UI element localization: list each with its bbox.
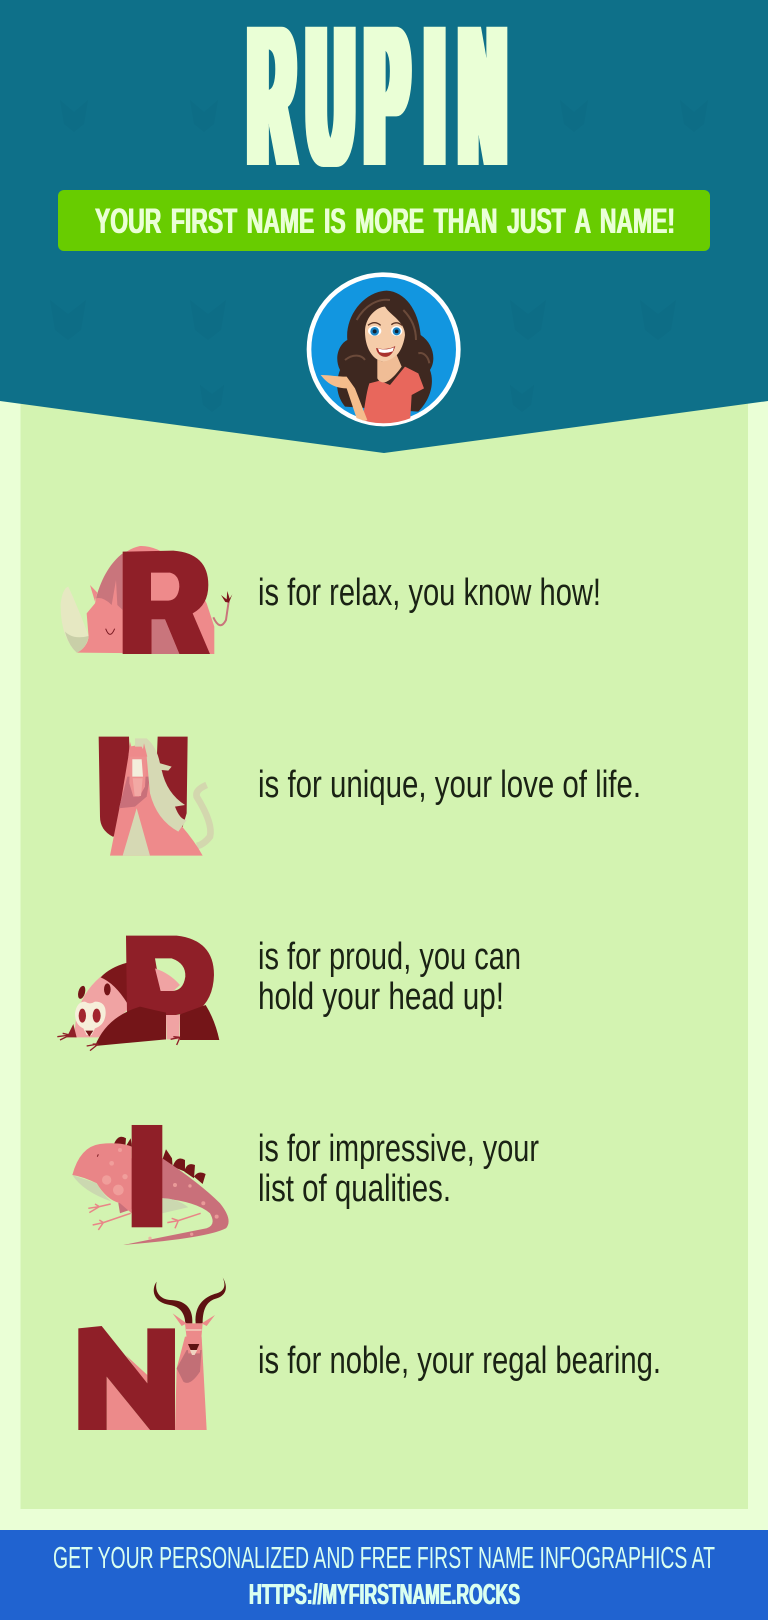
avatar: woman in circle (309, 275, 458, 424)
row 3 text (258, 936, 521, 1018)
tagline bar (58, 190, 710, 251)
header banner (0, 0, 768, 453)
row 3: letter P animal icon (57, 936, 219, 1051)
row 4: letter I iguana icon (72, 1125, 229, 1245)
row 5 text: is for noble, your regal bearing. (258, 1340, 661, 1382)
row 3 text: is for proud, you can (258, 936, 521, 978)
row 5: letter N antelope icon (78, 1277, 226, 1430)
row 1 text: is for relax, you know how! (258, 572, 601, 614)
footer (0, 1530, 768, 1620)
row 4 text: is for impressive, your (258, 1128, 539, 1170)
row 1: letter R rhino icon (61, 546, 232, 654)
row 4 text (258, 1128, 539, 1210)
row 3 text: hold your head up! (258, 976, 504, 1018)
row 4 text: list of qualities. (258, 1168, 451, 1210)
row 2: letter U horse icon (99, 737, 211, 856)
row 2 text: is for unique, your love of life. (258, 764, 641, 806)
panel: content background (20, 380, 748, 1509)
footer: HTTPS://MYFIRSTNAME.ROCKS (249, 1579, 520, 1611)
